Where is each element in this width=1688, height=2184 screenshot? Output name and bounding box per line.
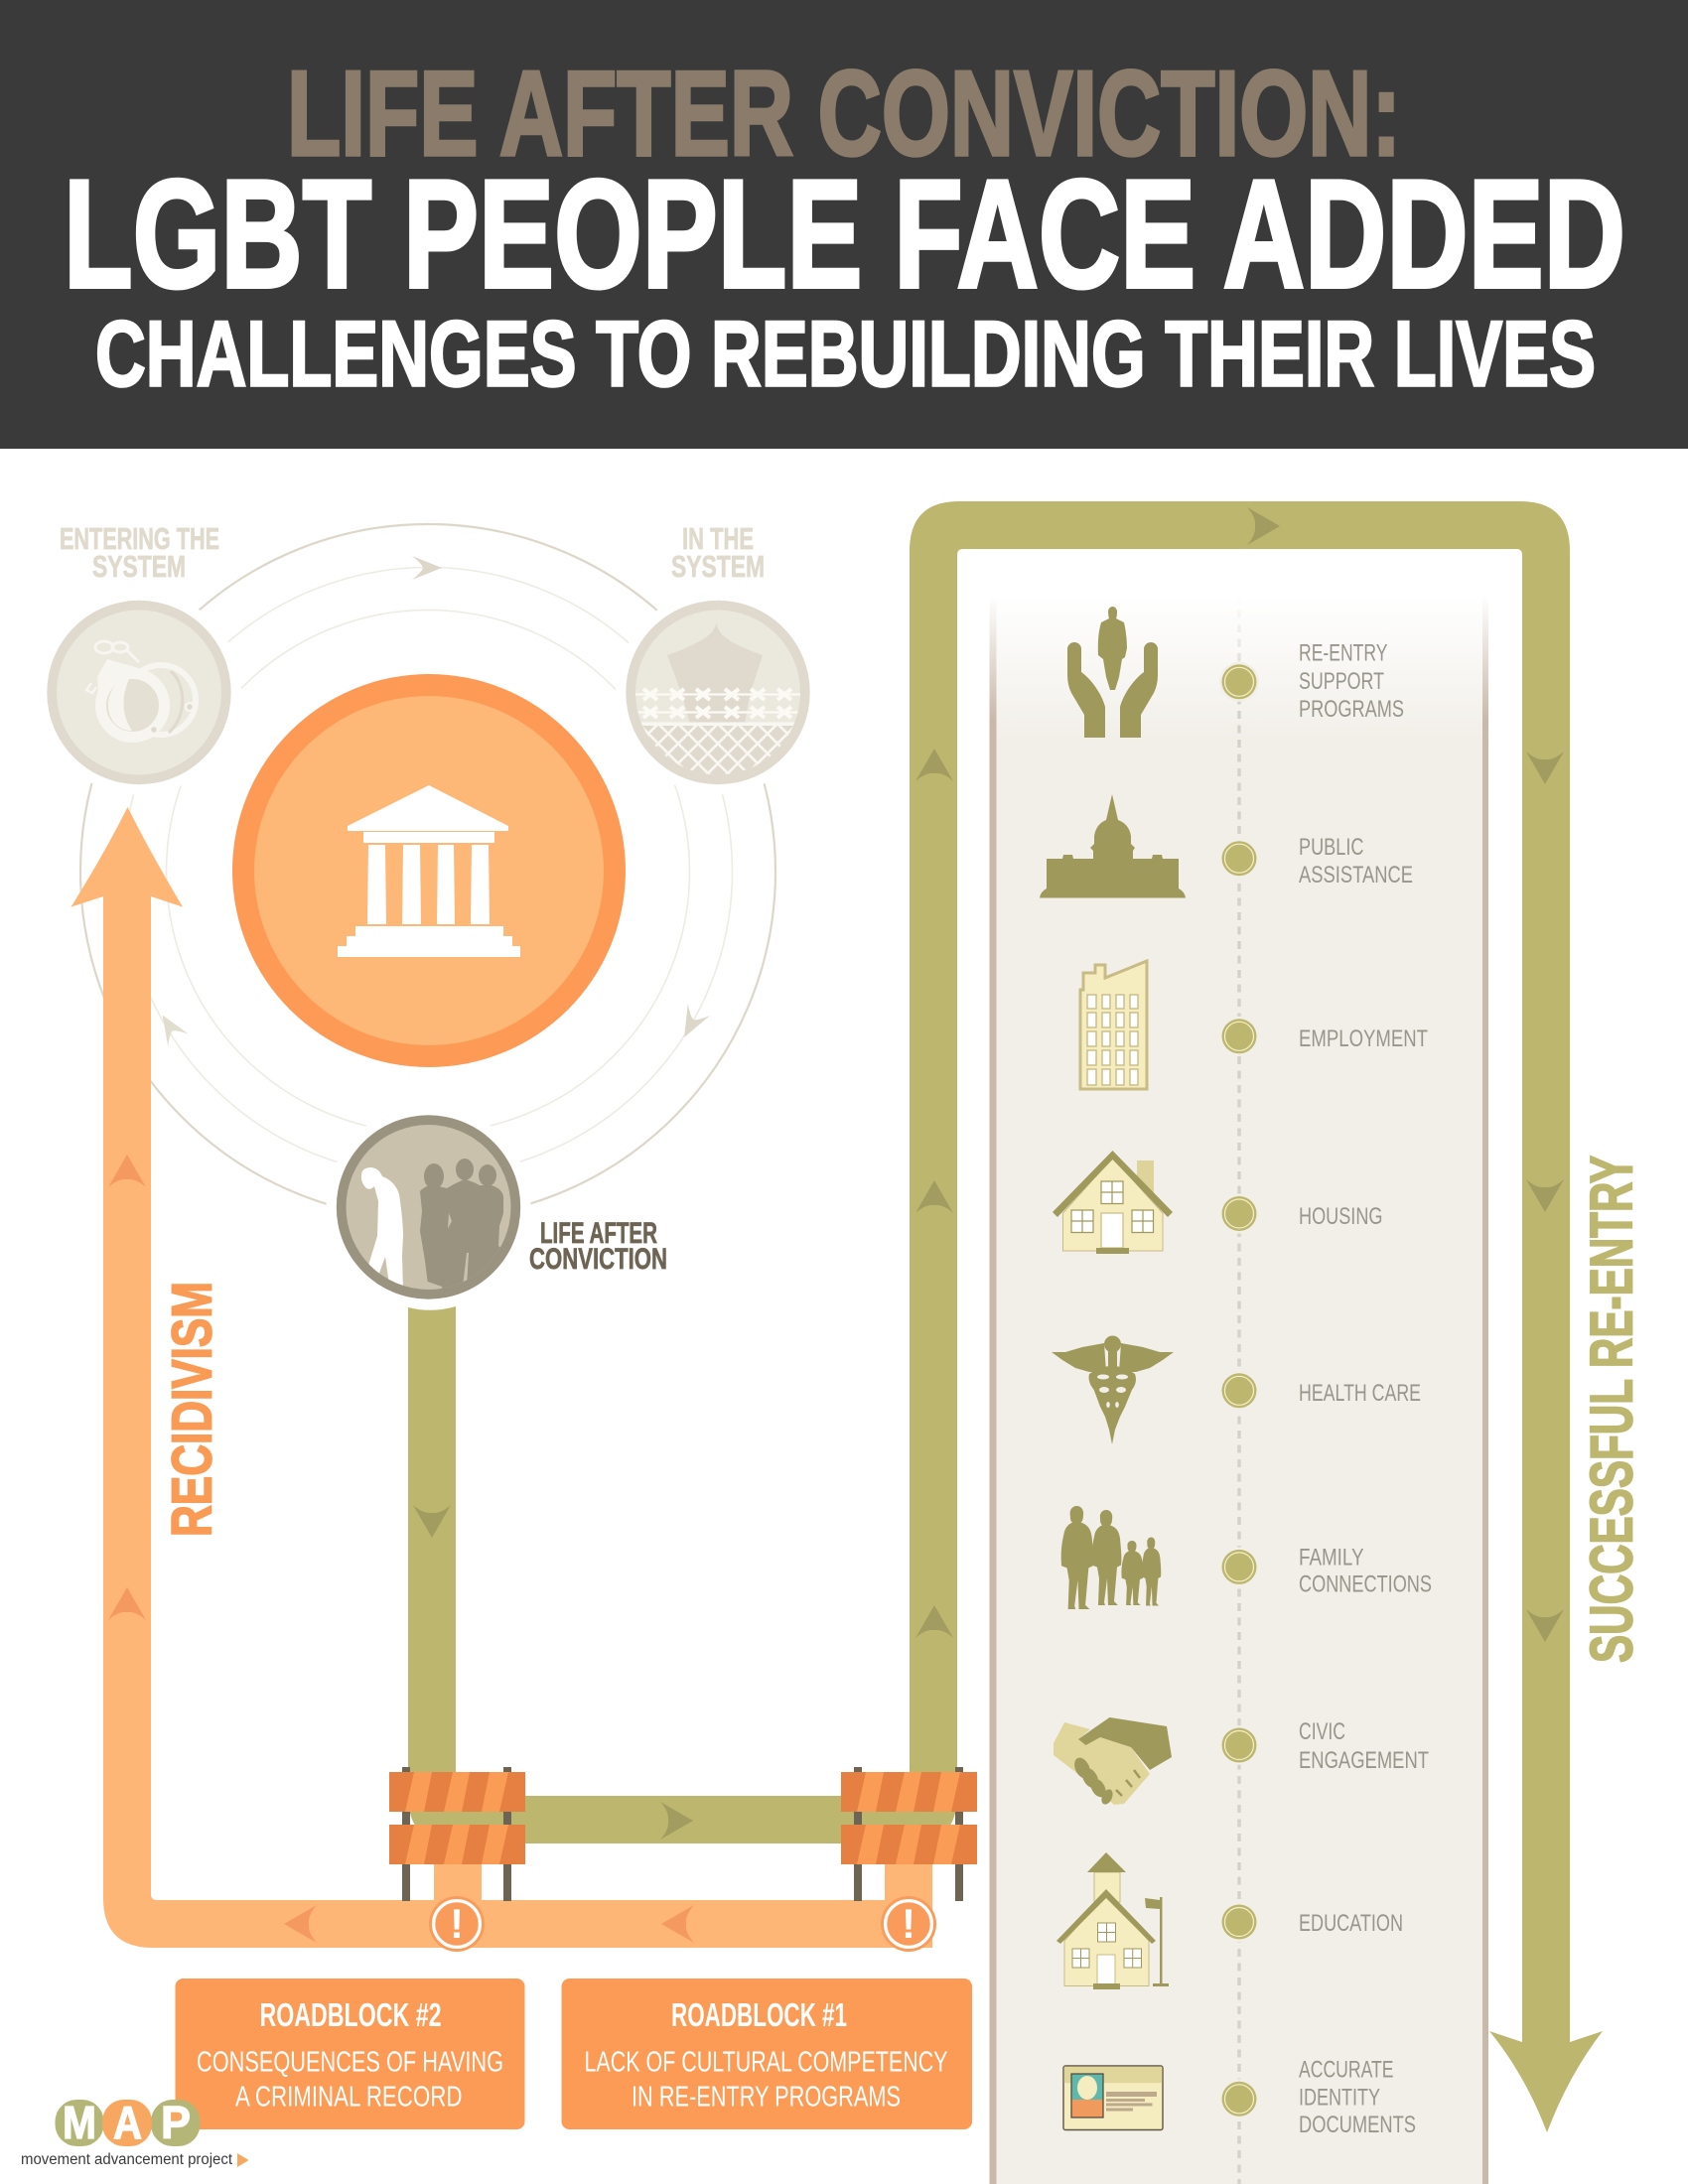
alert marker: roadblock 1: ! [902,1900,915,1947]
roadblock 2 text: CONSEQUENCES OF HAVING [197,2047,503,2079]
logo: MAP: P [161,2097,191,2148]
item: accurate identity documents [1063,2057,1416,2138]
panel: re-entry needs list [989,596,1488,2184]
ring arrow: top [412,556,442,580]
roadblock 1 text [584,2047,947,2113]
label: life after conviction [529,1217,667,1276]
item: accurate identity documents: DOCUMENTS [1299,2112,1416,2138]
logo wordmark: movement advancement project [21,2151,233,2168]
node: in the system [626,521,814,784]
item: housing: HOUSING [1299,1203,1382,1230]
icon: house [1053,1151,1173,1254]
icon: handshake [1054,1717,1172,1806]
icon: guard tower and fence [635,623,800,774]
label: recidivism: RECIDIVISM [161,1282,224,1537]
icon: hands holding person [1067,607,1158,738]
item: education [1056,1852,1403,1989]
node: entering the system [47,521,231,784]
panel: roadblock 1 [562,1979,972,2129]
item: re-entry support programs: RE-ENTRY [1299,640,1388,667]
barricade: roadblock 2 [389,1767,525,1901]
icon: handcuffs [86,641,196,737]
item: education: EDUCATION [1299,1910,1403,1937]
barricade: roadblock 1 [841,1767,977,1901]
node: life after conviction [337,1115,520,1299]
track arrows [108,507,1564,1943]
item: accurate identity documents: IDENTITY [1299,2085,1380,2112]
label: successful re-entry: SUCCESSFUL RE-ENTRY [1579,1156,1644,1663]
roadblock 2 heading: ROADBLOCK #2 [260,1996,441,2033]
label: entering the system: ENTERING THE [60,521,219,556]
roadblock 1 heading: ROADBLOCK #1 [671,1996,847,2033]
courthouse circle [232,674,626,1067]
item: health care: HEALTH CARE [1299,1380,1421,1407]
alert marker: roadblock 2 [429,1896,485,1952]
alert marker: roadblock 2: ! [450,1900,464,1947]
cycle rings [37,524,820,1309]
item: public assistance [1040,794,1413,897]
logo: MAP: M [63,2097,96,2148]
item: accurate identity documents: ACCURATE [1299,2057,1394,2084]
label: life after conviction: CONVICTION [529,1243,667,1276]
item: family connections: FAMILY [1299,1545,1364,1570]
orange recidivism track with arrow [71,807,932,1948]
item: family connections [1061,1506,1432,1609]
olive re-entry track with arrow [408,501,1603,2132]
item: civic engagement [1054,1717,1429,1806]
label: entering the system: SYSTEM [92,549,186,584]
ring arrow: right [673,1004,710,1043]
item: public assistance: PUBLIC [1299,834,1364,861]
icon: courthouse [338,785,520,957]
header banner [0,0,1688,449]
item: re-entry support programs [1067,607,1404,738]
item: re-entry support programs: PROGRAMS [1299,696,1404,723]
icon: people silhouettes [361,1159,508,1293]
item: employment [1080,961,1428,1089]
label: life after conviction: LIFE AFTER [540,1217,657,1250]
panel: roadblock 2 [175,1979,524,2129]
roadblock 1 text: IN RE-ENTRY PROGRAMS [632,2081,901,2113]
label: in the system: IN THE [682,521,754,556]
label: in the system: SYSTEM [671,549,765,584]
icon: office building [1080,961,1147,1089]
icon: ID card [1063,2066,1163,2130]
label: entering the system [60,521,219,584]
icon: schoolhouse [1056,1852,1169,1989]
alert marker: roadblock 1 [881,1896,936,1952]
roadblock 2 text [197,2047,503,2113]
item: family connections: CONNECTIONS [1299,1571,1432,1598]
item: public assistance: ASSISTANCE [1299,862,1413,888]
item: employment: EMPLOYMENT [1299,1025,1428,1052]
roadblock 1 text: LACK OF CULTURAL COMPETENCY [584,2047,947,2079]
item: civic engagement: ENGAGEMENT [1299,1747,1429,1774]
icon: family silhouettes [1061,1506,1161,1609]
item: housing [1053,1151,1382,1254]
logo: MAP [21,2097,248,2168]
roadblock 2 text: A CRIMINAL RECORD [235,2081,463,2113]
item: civic engagement: CIVIC [1299,1718,1345,1745]
ring arrow: left [152,1009,189,1046]
icon: caduceus [1052,1336,1174,1444]
icon: capitol building [1040,794,1186,897]
logo: MAP: A [113,2097,142,2148]
label: in the system [671,521,765,584]
item: health care [1052,1336,1421,1444]
item: re-entry support programs: SUPPORT [1299,668,1384,695]
